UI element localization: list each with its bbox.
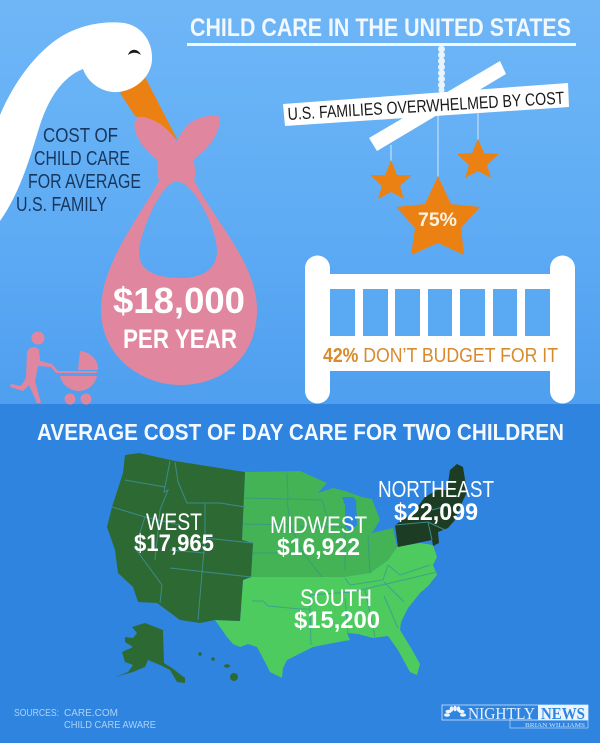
logo outline [442, 705, 588, 720]
icon: small star left [370, 160, 412, 199]
text: cost of child care caption: COST OF [43, 125, 118, 147]
region: south [215, 543, 437, 678]
label: midwest: $16,922 [277, 534, 360, 561]
label: south [294, 585, 380, 634]
panel: bottom map background [0, 404, 600, 743]
icon: large star with 75%: 75% [418, 210, 457, 231]
label: south: SOUTH [300, 585, 372, 612]
stork beak [120, 77, 178, 141]
bundle knot and ears [134, 116, 220, 182]
label: west: WEST [146, 509, 202, 536]
label: midwest: MIDWEST [270, 512, 367, 539]
map: United States by region [107, 453, 494, 683]
logo: NBC Nightly News [442, 704, 588, 729]
panel: top sky background [0, 0, 600, 404]
stork head and neck [0, 22, 152, 221]
icon: large star with 75% [396, 176, 480, 255]
crib slats [330, 289, 550, 336]
illustration: crib [305, 255, 575, 404]
mobile beaded cord [438, 46, 445, 93]
mobile strings [391, 100, 478, 178]
text: sources: SOURCES: [14, 707, 59, 719]
state: hawaii [198, 652, 238, 681]
text: sources [14, 707, 156, 731]
lake michigan [342, 497, 357, 531]
text: cost of child care caption [16, 125, 141, 216]
label: south: $15,200 [294, 607, 380, 634]
text: sources: CARE.COM [64, 707, 118, 719]
bundle amount: $18,000 [113, 280, 245, 321]
label: west [134, 509, 214, 557]
label: midwest [270, 512, 367, 561]
stork eye [128, 50, 141, 55]
illustration: mobile [283, 46, 569, 255]
text: cost of child care caption: FOR AVERAGE [28, 171, 141, 193]
label: northeast [378, 476, 494, 526]
mobile crossbar [369, 61, 506, 151]
logo peacock icon [444, 706, 466, 717]
logo anchor name: BRIAN WILLIAMS [525, 723, 585, 729]
text: cost of child care caption: U.S. FAMILY [16, 194, 107, 216]
icon: small star right [457, 139, 499, 178]
crib caption: 42% DON’T BUDGET FOR IT [323, 345, 558, 367]
state: alaska [115, 623, 185, 683]
region: midwest [242, 471, 397, 577]
logo news word: NEWS [541, 704, 585, 723]
logo news plate [538, 705, 588, 720]
text: sources: CHILD CARE AWARE [64, 719, 156, 731]
region: west [107, 453, 253, 623]
bundle body [101, 172, 257, 385]
label: northeast: $22,099 [394, 499, 478, 526]
illustration: stork [0, 22, 178, 221]
logo nightly word: NIGHTLY [468, 704, 535, 723]
label: west: $17,965 [134, 530, 214, 557]
region: northeast [395, 464, 467, 547]
logo anchor credit [510, 720, 588, 728]
illustration: pink baby bundle [101, 116, 257, 385]
bundle period: PER YEAR [123, 324, 237, 354]
label: northeast: NORTHEAST [378, 476, 494, 502]
crib frame [305, 255, 575, 404]
text: cost of child care caption: CHILD CARE [34, 148, 130, 170]
icon: person pushing stroller [10, 332, 98, 404]
